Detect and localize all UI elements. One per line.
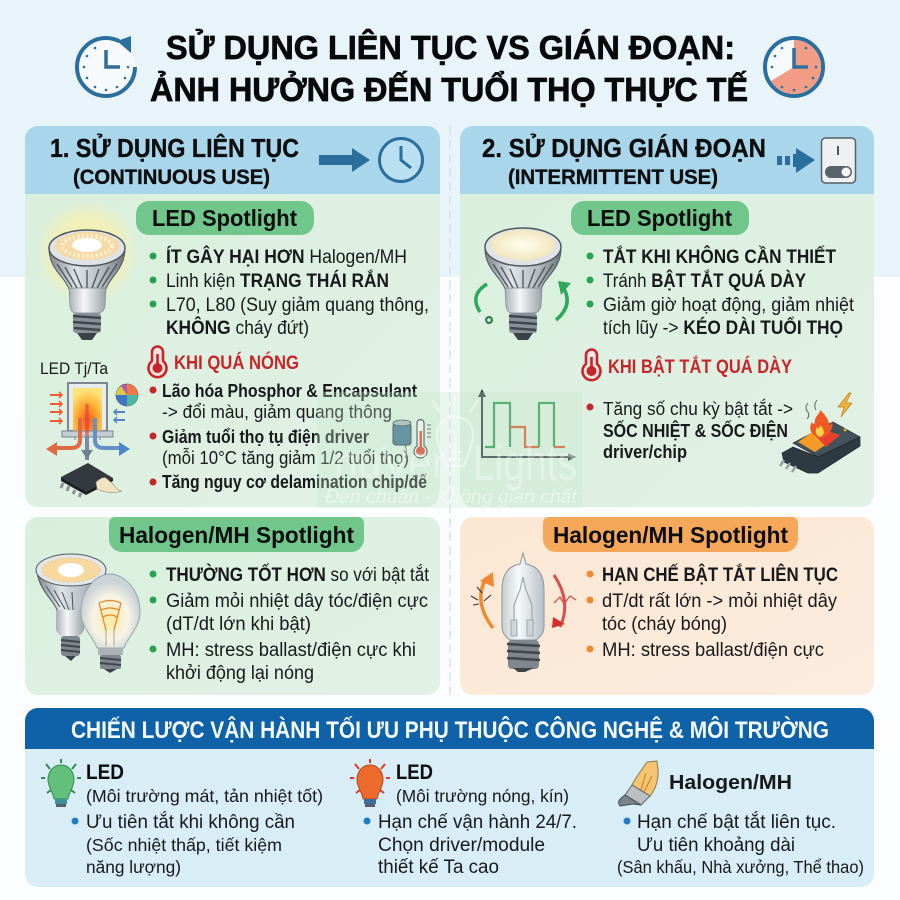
bullet list: Halogen continuous: khởi động lại nóng bbox=[166, 663, 314, 684]
panel header: intermittent use bbox=[460, 126, 874, 194]
bullet list: Halogen intermittent: dT/dt rất lớn -> mỏi nhiệt dây bbox=[602, 591, 837, 612]
bullet list: Halogen intermittent: MH: stress ballast/điện cực bbox=[602, 640, 824, 661]
bullet list: overheating effects bbox=[150, 381, 428, 492]
bullet list: LED continuous: L70, L80 (Suy giảm quang thông, bbox=[166, 295, 429, 316]
icon: LED spotlight off with cycling arrows bbox=[476, 228, 571, 340]
pill: Halogen/MH Spotlight: Halogen/MH Spotlight bbox=[119, 522, 354, 548]
watermark bbox=[317, 392, 582, 508]
bullet list: LED continuous: ÍT GÂY HẠI HƠN Halogen/MH bbox=[166, 246, 407, 268]
icon: orange LED bulb bbox=[350, 759, 390, 807]
column: LED hot environment: Chọn driver/module bbox=[378, 835, 545, 856]
heading: frequent switching: KHI BẬT TẮT QUÁ DÀY bbox=[608, 356, 792, 378]
column: LED hot environment: LED bbox=[396, 761, 433, 784]
icon: thermometer warning bbox=[582, 350, 601, 380]
panel header: continuous use: (CONTINUOUS USE) bbox=[73, 166, 270, 189]
bullet list: LED intermittent bbox=[586, 246, 855, 339]
panel: Halogen/MH intermittent bbox=[460, 517, 874, 695]
icon: burning driver with lightning bbox=[780, 393, 860, 473]
title bbox=[150, 29, 748, 108]
column: LED cool environment: LED bbox=[86, 761, 124, 784]
bullet list: switching effects: SỐC NHIỆT & SỐC ĐIỆN bbox=[603, 420, 788, 441]
diagram: LED junction heat bbox=[40, 359, 138, 497]
bullet list: Halogen continuous: MH: stress ballast/điện cực khi bbox=[166, 640, 416, 661]
column: Halogen/MH: Ưu tiên khoảng dài bbox=[637, 835, 795, 856]
pill: LED Spotlight: LED Spotlight bbox=[152, 205, 297, 231]
bullet list: LED continuous bbox=[150, 246, 429, 339]
panel: continuous use bbox=[25, 126, 440, 507]
panel header: intermittent use: (INTERMITTENT USE) bbox=[508, 166, 718, 189]
watermark: Lights bbox=[473, 435, 577, 491]
bullet list: Halogen intermittent: tóc (cháy bóng) bbox=[602, 614, 727, 635]
bullet list: LED continuous: Linh kiện TRẠNG THÁI RẮN bbox=[166, 270, 389, 292]
bullet list: Halogen continuous bbox=[150, 564, 430, 684]
column: Halogen/MH: Halogen/MH bbox=[669, 772, 792, 794]
icon: glowing LED spotlight bbox=[35, 200, 139, 340]
bullet list: overheating effects: Giảm tuổi thọ tụ điện driver bbox=[162, 427, 369, 447]
pill: LED Spotlight: LED Spotlight bbox=[587, 205, 732, 231]
title: SỬ DỤNG LIÊN TỤC VS GIÁN ĐOẠN: bbox=[166, 29, 735, 66]
panel: strategy bbox=[25, 708, 874, 887]
bullet list: LED intermittent: Giảm giờ hoạt động, giảm nhiệt bbox=[603, 295, 855, 316]
icon: green LED bulb bbox=[41, 759, 81, 807]
column: LED hot environment: Hạn chế vận hành 24/7. bbox=[378, 812, 577, 833]
chart: on-off cycles bbox=[478, 389, 576, 461]
panel: intermittent use bbox=[460, 126, 874, 507]
column: LED cool environment bbox=[41, 759, 323, 877]
pill: LED Spotlight bbox=[136, 201, 314, 235]
watermark: Đèn chuẩn - Không gian chất bbox=[325, 487, 578, 508]
bullet list: Halogen continuous: THƯỜNG TỐT HƠN so với bật tắt bbox=[166, 564, 430, 586]
diagram: LED junction heat: LED Tj/Ta bbox=[40, 359, 108, 378]
pill: Halogen/MH Spotlight bbox=[109, 517, 364, 552]
bullet list: Halogen intermittent: HẠN CHẾ BẬT TẮT LIÊN TỤC bbox=[602, 564, 838, 586]
pill: LED Spotlight bbox=[571, 201, 749, 235]
column: LED cool environment: (Sốc nhiệt thấp, tiết kiệm bbox=[86, 835, 282, 855]
panel: Halogen/MH continuous bbox=[25, 517, 440, 695]
bullet list: Halogen continuous: (dT/dt lớn khi bật) bbox=[166, 614, 311, 635]
column: LED cool environment: năng lượng) bbox=[86, 857, 181, 877]
bullet list: LED intermittent: Tránh BẬT TẮT QUÁ DÀY bbox=[603, 270, 806, 292]
column: LED hot environment: thiết kế Ta cao bbox=[378, 857, 499, 878]
column: LED hot environment: (Môi trường nóng, kín) bbox=[396, 786, 569, 806]
column: Halogen/MH: Hạn chế bật tắt liên tục. bbox=[637, 811, 836, 833]
column: Halogen/MH bbox=[617, 761, 864, 877]
panel header: continuous use: 1. SỬ DỤNG LIÊN TỤC bbox=[50, 132, 299, 163]
panel header: intermittent use: 2. SỬ DỤNG GIÁN ĐOẠN bbox=[482, 132, 766, 163]
column: LED cool environment: Ưu tiên tắt khi không cần bbox=[86, 811, 295, 833]
icon: thermometer warning bbox=[148, 346, 166, 377]
bullet list: Halogen intermittent bbox=[586, 564, 838, 661]
bullet list: switching effects bbox=[586, 398, 793, 462]
pill: Halogen/MH Spotlight: Halogen/MH Spotlight bbox=[553, 522, 788, 548]
icon: clock with shaded segment bbox=[765, 38, 823, 96]
icon: clock with refresh arrow bbox=[77, 36, 135, 96]
icon: halogen capsule bulb bbox=[619, 761, 658, 806]
bullet list: switching effects: Tăng số chu kỳ bật tắt -> bbox=[603, 398, 793, 419]
watermark: nuVer bbox=[334, 438, 446, 487]
bullet list: overheating effects: Lão hóa Phosphor & Encapsulant bbox=[162, 381, 417, 401]
icon: spotlight and incandescent bulb bbox=[36, 554, 140, 673]
bullet list: LED intermittent: tích lũy -> KÉO DÀI TUỔI THỌ bbox=[603, 317, 843, 339]
heading: overheating: KHI QUÁ NÓNG bbox=[174, 352, 299, 374]
icon: capacitor and thermometer bbox=[393, 420, 431, 458]
bullet list: switching effects: driver/chip bbox=[603, 441, 687, 462]
panel header: strategy bbox=[25, 708, 874, 749]
bullet list: LED intermittent: TẮT KHI KHÔNG CẦN THIẾT bbox=[603, 246, 836, 268]
bullet list: overheating effects: Tăng nguy cơ delamination chip/đế bbox=[162, 472, 428, 492]
bullet list: LED continuous: KHÔNG cháy đứt) bbox=[166, 317, 309, 339]
column: Halogen/MH: (Sân khấu, Nhà xưởng, Thể thao) bbox=[617, 857, 864, 877]
column: LED cool environment: (Môi trường mát, tản nhiệt tốt) bbox=[86, 786, 323, 806]
panel header: continuous use bbox=[25, 126, 440, 194]
bullet list: overheating effects: -> đổi màu, giảm quang thông bbox=[162, 402, 392, 422]
column: LED hot environment bbox=[350, 759, 577, 878]
title: ẢNH HƯỞNG ĐẾN TUỔI THỌ THỰC TẾ bbox=[150, 71, 748, 108]
icon: halogen capsule with arrows bbox=[471, 553, 576, 672]
bullet list: overheating effects: (mỗi 10°C tăng giảm 1/2 tuổi thọ) bbox=[162, 447, 409, 468]
pill: Halogen/MH Spotlight bbox=[543, 517, 798, 552]
bullet list: Halogen continuous: Giảm mỏi nhiệt dây tóc/điện cực bbox=[166, 591, 428, 612]
